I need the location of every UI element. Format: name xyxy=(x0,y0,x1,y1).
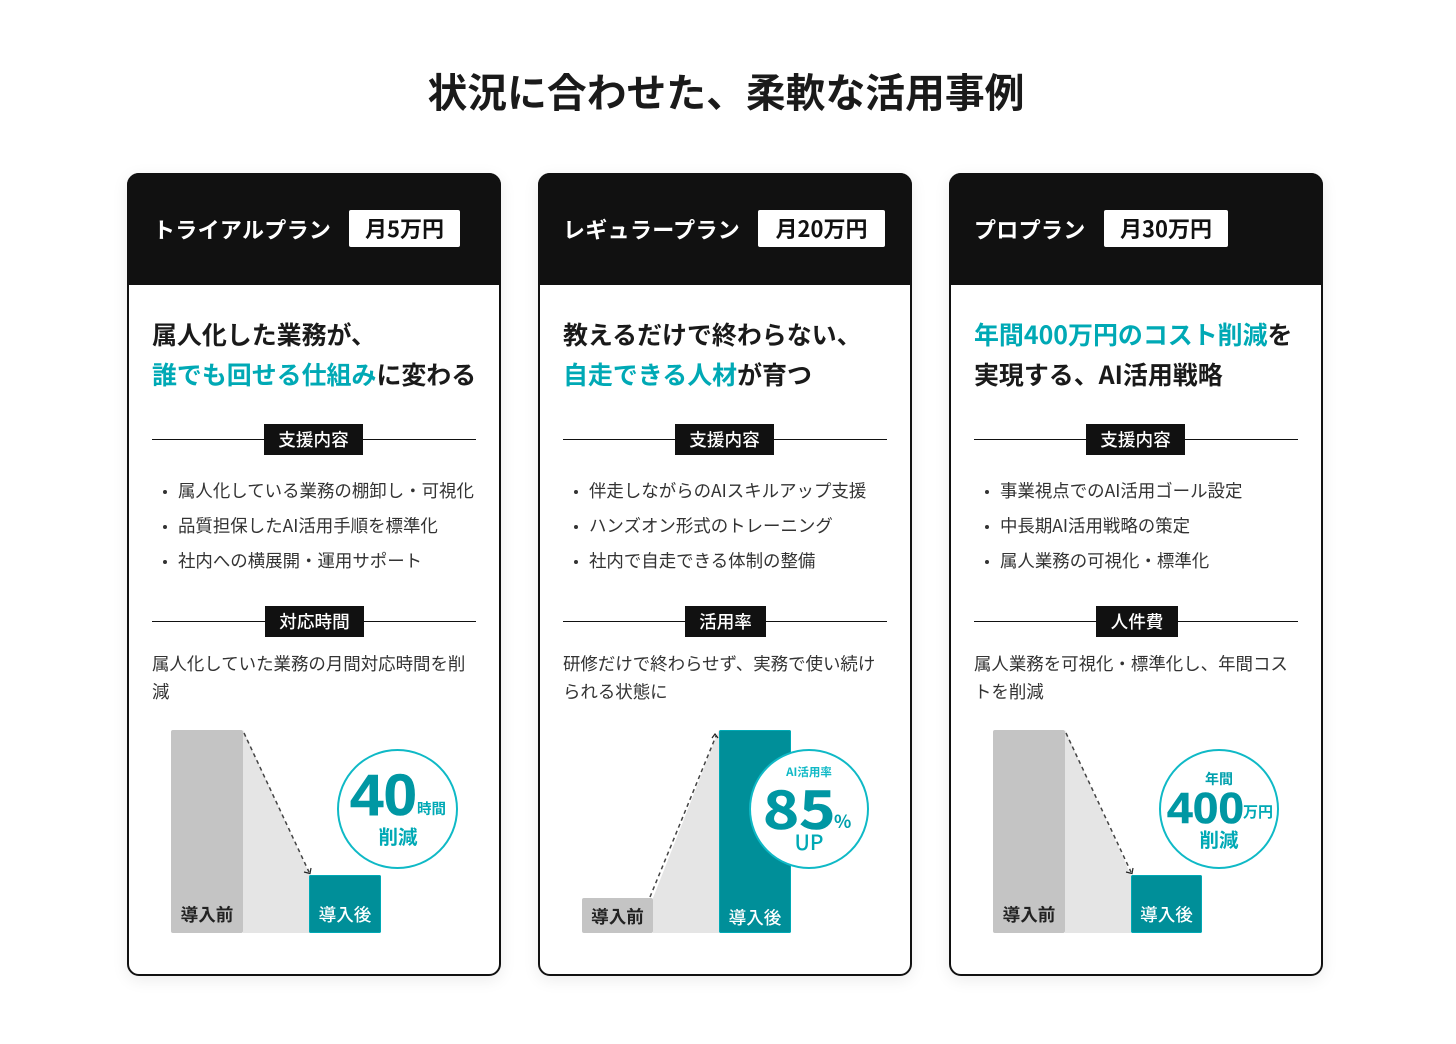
after bar xyxy=(719,730,791,933)
headline: 年間400万円のコスト削減を xyxy=(974,316,1292,352)
description: トを削減 xyxy=(974,679,1044,704)
before bar: 導入前 xyxy=(1003,902,1055,927)
caption: 削減 xyxy=(378,821,418,850)
section label: support xyxy=(264,424,363,455)
plan price xyxy=(349,210,460,247)
plan header xyxy=(127,173,501,285)
plan price: 月20万円 xyxy=(776,212,867,244)
section label: labor cost xyxy=(1096,606,1178,637)
before bar xyxy=(171,730,243,933)
chart: before and after xyxy=(171,730,381,933)
section label: support: 支援内容 xyxy=(278,427,349,452)
plan name: トライアルプラン xyxy=(153,213,331,245)
after bar: 導入後 xyxy=(319,902,371,927)
result badge xyxy=(1159,749,1279,869)
description: 属人化していた業務の月間対応時間を削 xyxy=(152,651,465,676)
plan header xyxy=(538,173,912,285)
value: 400 xyxy=(1167,784,1244,833)
plan name: プロプラン xyxy=(974,213,1086,245)
section label: support xyxy=(1086,424,1185,455)
section rule: labor cost xyxy=(974,621,1298,622)
description xyxy=(974,651,1288,704)
bullet 2: ハンズオン形式のトレーニング xyxy=(589,513,833,538)
before bar: 導入前 xyxy=(591,904,644,929)
section label: usage rate xyxy=(685,606,766,637)
description xyxy=(152,651,465,704)
description: られる状態に xyxy=(563,679,668,704)
section rule: support xyxy=(563,439,887,440)
section label: labor cost: 人件費 xyxy=(1111,609,1163,634)
plan price xyxy=(758,210,885,247)
caption top: 年間 xyxy=(1205,769,1233,789)
section label: response time: 対応時間 xyxy=(279,609,350,634)
section label: support xyxy=(675,424,774,455)
connector and arrow xyxy=(243,730,312,933)
result badge xyxy=(749,749,869,869)
bullet 3: 社内で自走できる体制の整備 xyxy=(589,548,815,573)
panel: trial plan xyxy=(127,173,501,976)
unit: 万円 xyxy=(1243,801,1273,822)
section rule: usage rate xyxy=(563,621,887,622)
plan name: レギュラープラン xyxy=(563,213,740,245)
bullet 3: 社内への横展開・運用サポート xyxy=(178,548,422,573)
value: 85 xyxy=(763,769,835,844)
headline xyxy=(152,316,476,392)
caption top: AI活用率 xyxy=(786,764,832,780)
plan header xyxy=(949,173,1323,285)
panel: pro plan xyxy=(949,173,1323,976)
headline: 属人化した業務が、 xyxy=(152,316,376,352)
section label: response time xyxy=(265,606,364,637)
caption bottom: 削減 xyxy=(1199,824,1238,853)
bullet 1: 属人化している業務の棚卸し・可視化 xyxy=(178,478,474,503)
title: 状況に合わせた、柔軟な活用事例 xyxy=(428,62,1024,119)
section rule: support xyxy=(152,439,476,440)
bullet 2: 中長期AI活用戦略の策定 xyxy=(1000,513,1190,538)
headline: 実現する、AI活用戦略 xyxy=(974,356,1223,392)
plan price xyxy=(1104,210,1228,247)
description: 減 xyxy=(152,679,169,704)
headline: 自走できる人材が育つ xyxy=(563,356,812,392)
unit: 時間 xyxy=(417,798,446,819)
value: 40 xyxy=(350,763,417,828)
description: 属人業務を可視化・標準化し、年間コス xyxy=(974,651,1288,676)
headline: 誰でも回せる仕組みに変わる xyxy=(152,356,476,392)
section label: usage rate: 活用率 xyxy=(699,609,752,634)
section label: support: 支援内容 xyxy=(1100,427,1171,452)
panel: regular plan xyxy=(538,173,912,976)
before bar xyxy=(993,730,1065,933)
plan price: 月30万円 xyxy=(1120,212,1212,244)
after bar: 導入後 xyxy=(729,905,781,930)
section rule: response time xyxy=(152,621,476,622)
before bar xyxy=(582,898,653,933)
headline xyxy=(563,316,862,392)
connector and arrow xyxy=(649,730,719,933)
description xyxy=(563,651,875,704)
headline xyxy=(974,316,1292,392)
after bar xyxy=(1131,875,1202,933)
section rule: support xyxy=(974,439,1298,440)
plan price: 月5万円 xyxy=(365,212,444,244)
bullet 3: 属人業務の可視化・標準化 xyxy=(1000,548,1209,573)
chart: before and after xyxy=(993,730,1202,933)
section label: support: 支援内容 xyxy=(689,427,760,452)
connector and arrow xyxy=(1065,730,1134,933)
after bar: 導入後 xyxy=(1140,902,1193,927)
result badge xyxy=(337,749,458,869)
bullet 1: 事業視点でのAI活用ゴール設定 xyxy=(1000,478,1242,503)
caption bottom: UP xyxy=(794,827,824,857)
bullet 1: 伴走しながらのAIスキルアップ支援 xyxy=(589,478,866,503)
bullet 2: 品質担保したAI活用手順を標準化 xyxy=(178,513,438,538)
after bar xyxy=(309,875,381,933)
unit: % xyxy=(834,808,851,834)
description: 研修だけで終わらせず、実務で使い続け xyxy=(563,651,875,676)
before bar: 導入前 xyxy=(181,902,233,927)
headline: 教えるだけで終わらない、 xyxy=(563,316,862,352)
chart: before and after xyxy=(582,730,791,933)
